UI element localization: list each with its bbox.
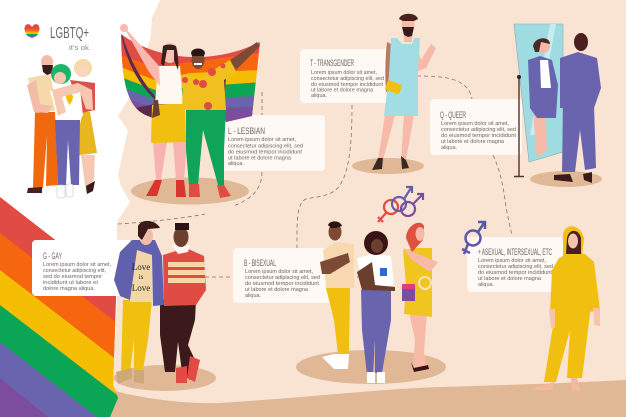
card: B bisexual: do eiusmod tempor incididunt <box>245 281 320 287</box>
card: plus <box>467 237 563 292</box>
figure: queer person in suit <box>554 33 601 183</box>
card: L lesbian: L - LESBIAN <box>228 126 265 137</box>
figure: bisexual woman with red hair <box>402 223 438 372</box>
figure: bisexual woman <box>357 231 395 383</box>
card: plus: + ASEXUAL, INTERSEXUAL, ETC <box>478 247 552 258</box>
figure: gay couple: is <box>139 273 144 281</box>
card: plus: Lorem ipsum dolor sit amet, <box>478 258 547 264</box>
card: G gay: Lorem ipsum dolor sit amet, <box>43 262 112 268</box>
card: L lesbian: Lorem ipsum dolor sit amet, <box>228 137 297 143</box>
card: T transgender: consectetur adipiscing elit, sed <box>311 76 384 82</box>
card: T transgender: T - TRANSGENDER <box>310 58 354 69</box>
title: LGBTQ+ <box>50 25 89 42</box>
card: B bisexual: consectetur adipiscing elit, sed <box>245 275 320 281</box>
card: G gay: G - GAY <box>43 251 62 262</box>
card: Q queer: do eiusmod tempor incididunt <box>441 133 517 139</box>
figure: person in yellow onesie <box>530 226 600 391</box>
card: Q queer: consectetur adipiscing elit, sed <box>441 127 516 133</box>
card: G gay: consectetur adipiscing elit, <box>43 268 106 274</box>
card: G gay: incididunt ut labore et <box>43 280 99 286</box>
icon: gender symbols <box>378 187 423 222</box>
card: T transgender: do eiusmod tempor incididunt <box>311 82 384 88</box>
figure: transgender woman <box>372 14 436 170</box>
card: B bisexual: aliqua. <box>245 293 261 299</box>
floor shadows <box>114 158 602 391</box>
card: plus: consectetur adipiscing elit, sed <box>478 264 553 270</box>
card: G gay <box>32 240 132 296</box>
card: T transgender: Lorem ipsum dolor sit amet, <box>311 70 377 76</box>
figure: gay couple <box>114 221 206 384</box>
flag <box>121 34 260 122</box>
white left region <box>0 0 160 417</box>
card: Q queer <box>430 99 522 155</box>
figure: bisexual man <box>320 221 354 369</box>
icon: mirror <box>514 24 563 176</box>
card: B bisexual: Lorem ipsum dolor sit amet, <box>245 269 314 275</box>
icon: intersex symbol <box>462 222 485 254</box>
card: T transgender: aliqua. <box>311 93 327 99</box>
card: plus: ut labore et dolore magna <box>478 276 541 282</box>
card: plus: do eiusmod tempor incididunt <box>478 270 553 276</box>
card: Q queer: Lorem ipsum dolor sit amet, <box>441 121 510 127</box>
figure: gay couple: Love <box>132 262 150 272</box>
dashed connectors <box>118 76 512 277</box>
card: L lesbian: ut labore et dolore magna <box>228 156 291 162</box>
figure: gay couple: Love <box>132 283 150 293</box>
card: plus: aliqua. <box>478 282 494 288</box>
card: L lesbian <box>217 115 325 171</box>
card: T transgender <box>300 49 392 103</box>
card: Q queer: aliqua. <box>441 145 457 151</box>
rainbow stripes <box>0 197 130 417</box>
card: L lesbian: consectetur adipiscing elit, sed <box>228 144 303 150</box>
figure: lesbian couple <box>120 24 260 198</box>
card: G gay: sed do eiusmod tempor <box>43 274 102 280</box>
card: B bisexual <box>233 248 333 303</box>
figures: LGBTQ trio <box>27 55 97 198</box>
card: L lesbian: do eiusmod tempor incididunt <box>228 150 303 156</box>
icon: rainbow heart <box>24 24 40 38</box>
ground <box>110 380 626 417</box>
card: Q queer: Q - QUEER <box>440 110 466 121</box>
card: B bisexual: B - BISEXUAL <box>244 258 276 269</box>
card: B bisexual: ut labore et dolore magna <box>245 287 308 293</box>
card: T transgender: ut labore et dolore magna <box>311 88 373 94</box>
card: L lesbian: aliqua. <box>228 161 244 167</box>
subtitle: it's ok <box>69 43 89 52</box>
card: Q queer: ut labore et dolore magna <box>441 139 504 145</box>
card: G gay: dolore magna aliqua. <box>43 286 95 292</box>
